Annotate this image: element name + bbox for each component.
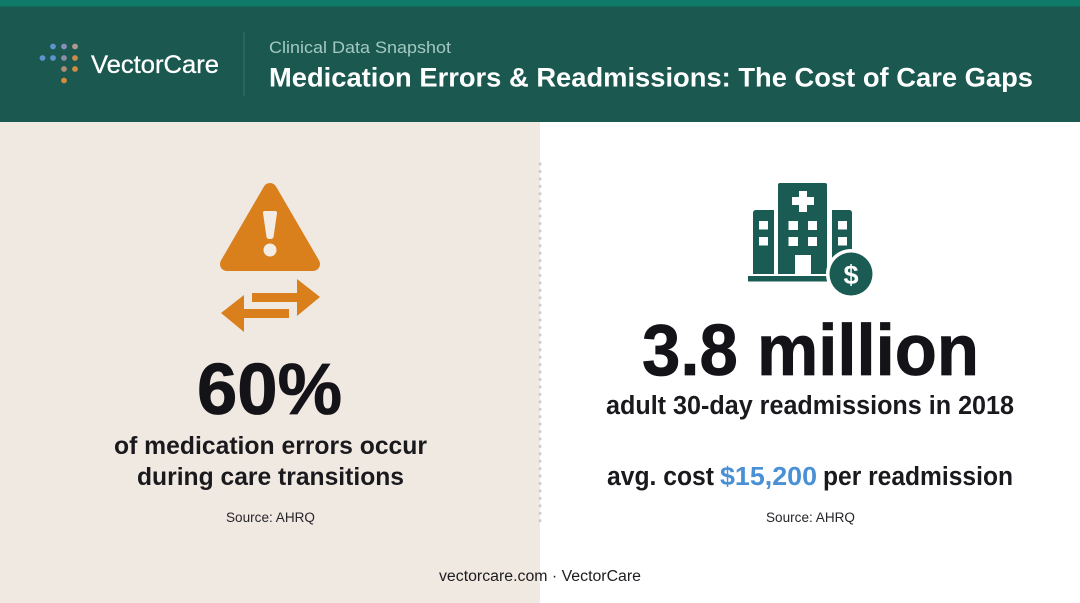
logo wordmark: VectorCare: [91, 51, 219, 79]
source: Source: AHRQ: [766, 510, 855, 525]
big number: 60%: 60%: [197, 350, 342, 430]
panel: left background: [0, 122, 540, 603]
average cost line: per readmission: [823, 463, 1013, 491]
title: Medication Errors & Readmissions: The Cost of Care Gaps: [269, 62, 1033, 92]
header subtitle: Clinical Data Snapshot: [269, 38, 451, 57]
icon: transfer arrows: [221, 279, 320, 332]
icon: hospital with dollar badge: $: [843, 260, 859, 290]
icon: hospital with dollar badge: [748, 183, 876, 299]
average cost line: avg. cost: [607, 463, 714, 491]
readmissions label: adult 30-day readmissions in 2018: [606, 392, 1014, 420]
source: Source: AHRQ: [226, 510, 315, 525]
icon: warning triangle: [227, 190, 313, 264]
panel: right statistic: [606, 183, 1014, 525]
average cost line: $15,200: [720, 463, 817, 491]
header band: [0, 0, 1080, 122]
description: during care transitions: [137, 463, 404, 491]
description: [114, 432, 427, 491]
panel: left statistic: [114, 190, 427, 525]
icon: logo dots: [40, 44, 78, 83]
footer: vectorcare.com · VectorCare: [439, 568, 641, 585]
average cost line: [607, 463, 1013, 491]
description: of medication errors occur: [114, 432, 427, 460]
big number: 3.8 million: 3.8 million: [642, 311, 979, 391]
dotted center divider: [538, 164, 542, 528]
